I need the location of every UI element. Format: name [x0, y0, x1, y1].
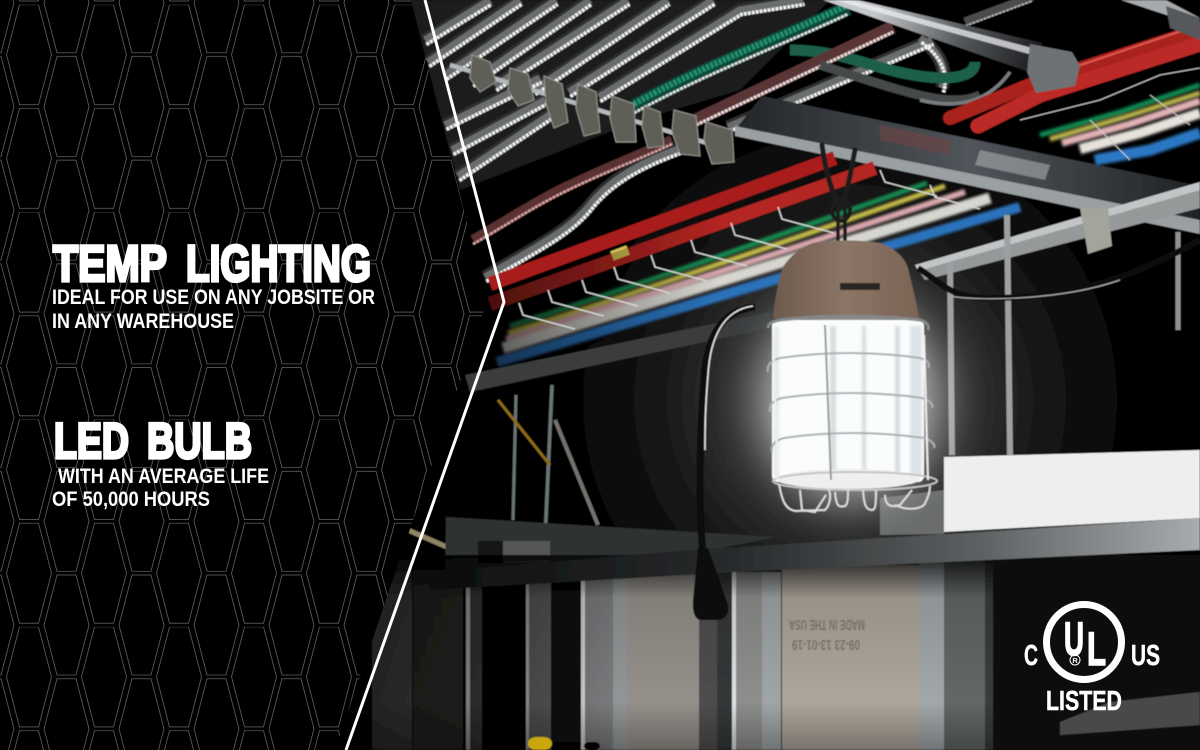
panel: black honeycomb sidebar — [0, 0, 487, 750]
LED body — [772, 320, 924, 482]
heading: LED bulb: LED — [54, 413, 129, 469]
upper-left ceiling shadow — [410, 0, 830, 190]
steel strut channel — [735, 96, 1200, 234]
drywall stencil text — [789, 616, 865, 653]
icon: UL listed mark: L — [1087, 622, 1106, 675]
silver conduit crossing right — [915, 182, 1200, 280]
yellow and grey flex lines — [408, 400, 660, 556]
drywall stencil text: MADE IN THE USA — [789, 616, 865, 633]
LED tube gaps — [774, 326, 922, 476]
LED base — [776, 469, 920, 489]
rear duct and junction box — [445, 517, 778, 572]
glow around the lamp — [450, 100, 1200, 700]
text block: temp lighting description — [52, 286, 375, 333]
tray shadow toward the left — [480, 215, 740, 385]
beam under tray — [465, 312, 770, 392]
main cable tray with coloured wires — [497, 183, 1020, 362]
white chevron divider — [346, 0, 504, 750]
hanging hook — [822, 145, 855, 242]
icon: UL listed mark — [1024, 604, 1160, 716]
lamp glow — [755, 295, 945, 505]
icon: UL listed mark: U — [1064, 612, 1084, 665]
upper right cable tray — [1040, 85, 1200, 160]
text block: LED bulb description: WITH AN AVERAGE LIFE — [58, 465, 269, 488]
icon: UL listed mark: US — [1131, 640, 1160, 672]
threaded rod with clamps — [450, 55, 734, 164]
wire cage — [768, 316, 937, 512]
icon: UL listed mark: C — [1024, 640, 1038, 672]
power cord left and plug — [693, 306, 755, 620]
heading: LED bulb: BULB — [147, 413, 252, 469]
text block: temp lighting description: IDEAL FOR USE ON ANY JOBSITE OR — [52, 286, 375, 309]
white box on beam — [880, 450, 1200, 535]
heading: temp lighting: TEMP — [53, 235, 167, 292]
wire mesh hooks — [519, 170, 980, 329]
wall studs and drywall — [360, 555, 1200, 750]
top right wire mesh — [1020, 68, 1200, 160]
text block: temp lighting description: IN ANY WAREHOUSE — [52, 310, 234, 333]
heading: temp lighting — [53, 235, 371, 292]
heading: temp lighting: LIGHTING — [186, 235, 371, 292]
steel header beam — [430, 518, 1200, 590]
pink ribbed conduits — [473, 27, 893, 244]
icon: UL listed mark: R — [1072, 656, 1078, 665]
large silver pipe and clamp — [823, 0, 1200, 93]
ribbed metal conduits — [425, 0, 945, 281]
heading: LED bulb — [54, 413, 252, 469]
text block: LED bulb description: OF 50,000 HOURS — [52, 488, 210, 511]
text block: LED bulb description — [52, 465, 269, 511]
grey strands along conduit — [820, 0, 1032, 104]
power cord right — [918, 240, 1200, 299]
hanging rods — [513, 215, 1178, 540]
icon: UL listed mark: LISTED — [1046, 685, 1122, 716]
dome label — [840, 283, 880, 290]
green conduit — [634, 5, 975, 113]
red pipes lower — [490, 158, 875, 304]
work light — [768, 240, 937, 512]
lamp dome — [773, 240, 919, 318]
drywall stencil text: 09-23 13-01-19 — [792, 636, 860, 653]
photo: jobsite ceiling with temp light — [300, 0, 1200, 750]
red pipes upper right — [950, 28, 1200, 126]
